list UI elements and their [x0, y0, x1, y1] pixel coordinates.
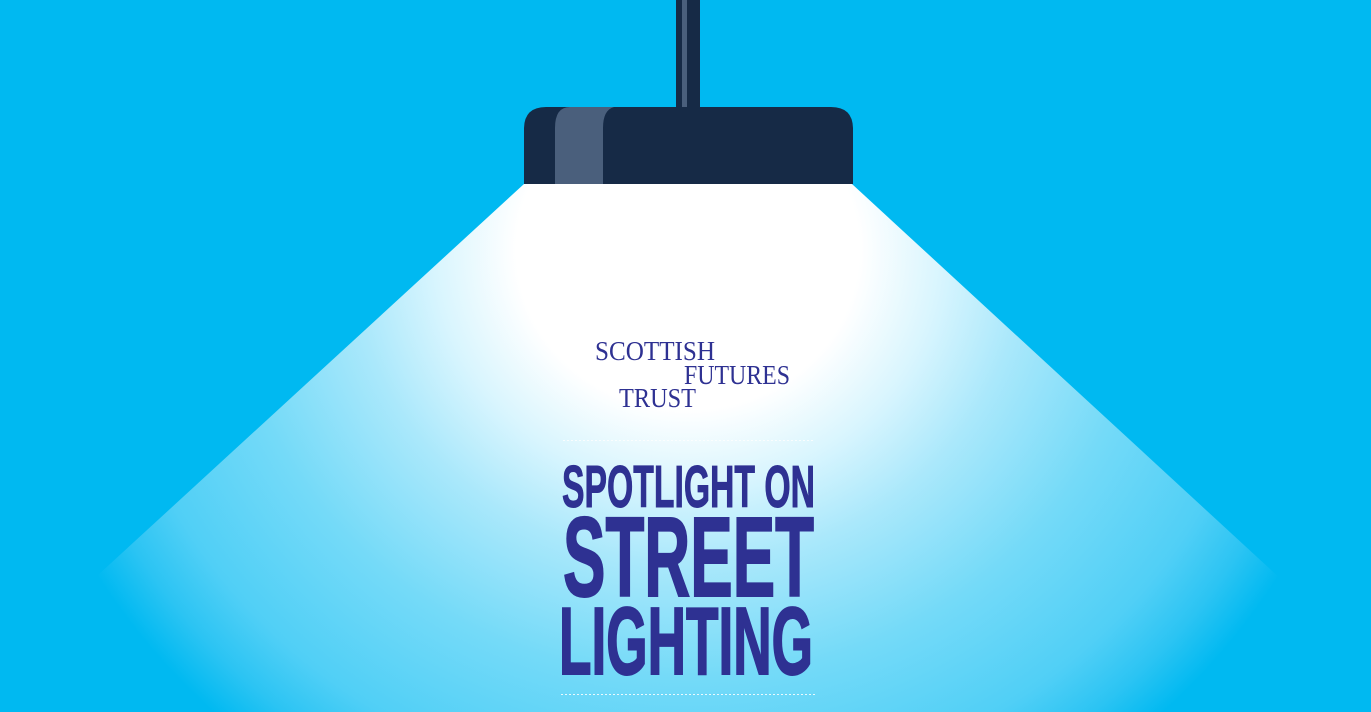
top dotted divider [563, 440, 815, 442]
light beam [0, 184, 1371, 712]
logo: Scottish Futures Trust: TRUST [619, 383, 696, 413]
logo: Scottish Futures Trust [595, 336, 790, 413]
title: Spotlight on Street Lighting: STREET [563, 494, 814, 620]
logo: Scottish Futures Trust: FUTURES [684, 360, 790, 390]
lamp cord [676, 0, 700, 108]
bottom dotted divider [561, 694, 815, 696]
lamp housing [524, 107, 853, 184]
title: Spotlight on Street Lighting: LIGHTING [559, 588, 813, 695]
lamp [524, 0, 853, 184]
lamp highlight [555, 107, 614, 184]
title: Spotlight on Street Lighting: SPOTLIGHT ON [562, 454, 815, 520]
title: Spotlight on Street Lighting [559, 454, 815, 695]
logo: Scottish Futures Trust: SCOTTISH [595, 336, 715, 366]
